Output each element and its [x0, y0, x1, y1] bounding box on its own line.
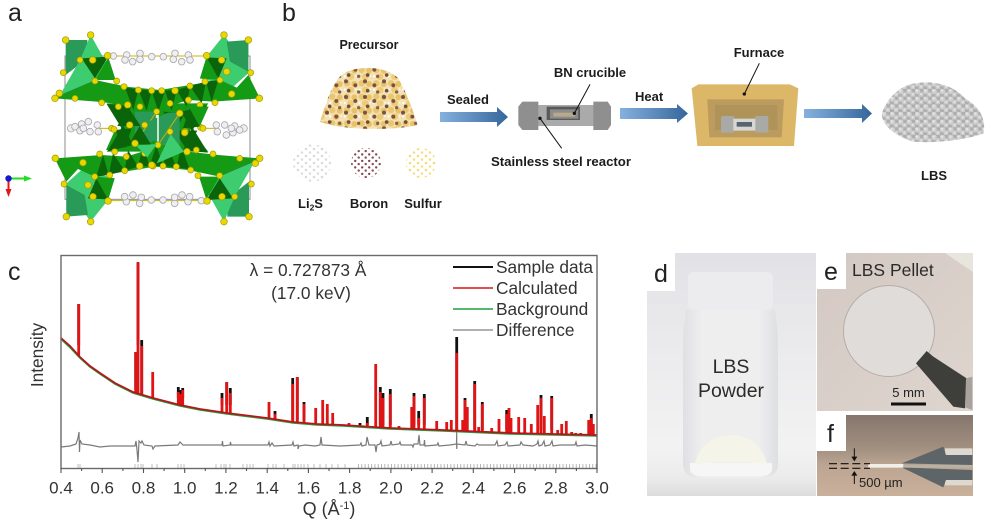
photo background: [647, 253, 816, 496]
thickness marker: [829, 448, 870, 484]
x axis labels: 2.0: [379, 478, 403, 498]
tweezers: [916, 351, 972, 410]
panel label e: e: [824, 258, 838, 286]
difference curve: [61, 432, 597, 462]
x axis labels: 1.8: [338, 478, 361, 498]
vial cap: [688, 272, 773, 310]
arrow: heat: [620, 104, 688, 123]
unit cell box: [65, 56, 250, 199]
panel e: pellet photo: [817, 253, 973, 411]
powder mound: [695, 435, 767, 464]
wavelength note: [250, 260, 367, 303]
x axis labels: 1.6: [297, 478, 320, 498]
lower half of crystal structure: [52, 107, 263, 225]
panel label f: f: [827, 420, 834, 448]
reactor: [518, 84, 611, 148]
scale bar 5 mm: 5 mm: [892, 385, 925, 400]
x axis labels: 0.6: [90, 478, 114, 498]
x axis labels: 0.4: [49, 478, 73, 498]
y axis title: Intensity: [27, 322, 47, 387]
label Furnace: Furnace: [734, 45, 784, 60]
corner highlight: [945, 253, 973, 272]
reflection tick marks: [78, 464, 597, 468]
furnace: [692, 63, 798, 146]
label LBS Pellet: LBS Pellet: [852, 260, 934, 280]
label LBS: LBS: [921, 168, 947, 183]
x axis labels: 1.2: [214, 478, 238, 498]
label Boron: Boron: [350, 196, 388, 211]
x axis labels: 0.8: [132, 478, 155, 498]
wavelength note: λ = 0.727873 Å: [250, 260, 367, 280]
panel label d: d: [654, 260, 668, 288]
arrow: to LBS: [804, 104, 872, 123]
x axis labels: 2.8: [544, 478, 568, 498]
LBS pile: [882, 82, 984, 142]
x axis labels: 2.4: [461, 478, 485, 498]
legend: [453, 257, 593, 340]
axis ticks: [61, 468, 597, 473]
photo background: [817, 253, 973, 411]
x axis title: Q (Å: [303, 499, 340, 519]
legend: Difference: [496, 320, 574, 340]
label BN crucible: BN crucible: [554, 65, 626, 80]
x axis labels: 1.0: [173, 478, 197, 498]
label Li2S: Li: [298, 196, 310, 211]
central light faces: [132, 129, 184, 168]
icon: sulfur dots: [406, 148, 436, 178]
precursor pile: [320, 68, 418, 129]
wavelength note: (17.0 keV): [271, 283, 351, 303]
x axis labels: 2.6: [503, 478, 526, 498]
x axis title: ): [349, 499, 355, 519]
icon: boron dots: [351, 148, 381, 178]
arrow: sealed: [440, 107, 508, 127]
plot frame: [61, 256, 597, 468]
photo background: [817, 415, 973, 496]
pellet disc: [844, 286, 934, 376]
half of crystal structure: [52, 32, 263, 150]
background line: [61, 339, 597, 436]
label stainless steel reactor: Stainless steel reactor: [491, 154, 631, 169]
panel a: crystal structure: [52, 32, 263, 225]
x axis labels: 3.0: [585, 478, 609, 498]
vial glass: [683, 310, 778, 478]
x axis title: -1: [340, 500, 349, 512]
label LBS Powder: Powder: [698, 380, 765, 402]
icon: Li2S dots: [293, 144, 331, 182]
vial bottom: [690, 463, 772, 476]
axes indicator: [5, 175, 32, 197]
panel label c: c: [8, 258, 20, 286]
calculated curve: [61, 338, 597, 435]
central framework backing: [107, 103, 208, 152]
legend: Calculated: [496, 278, 578, 298]
label Sealed: Sealed: [447, 92, 489, 107]
label Heat: Heat: [635, 89, 664, 104]
panel b: synthesis schematic: [293, 38, 984, 212]
scale bar 5 mm: [891, 385, 926, 406]
calculated peaks: [79, 262, 593, 440]
precursor heading: Precursor: [339, 38, 399, 52]
x axis labels: 1.4: [255, 478, 279, 498]
mask below background curve: [61, 339, 597, 442]
label Li2S: 2: [310, 202, 315, 212]
tweezers and pellet edge: [868, 447, 972, 487]
legend: Background: [496, 299, 588, 319]
panel c: diffraction chart: [27, 256, 609, 519]
x axis labels: 2.2: [420, 478, 444, 498]
panel d: vial photo: [647, 253, 816, 496]
label Li2S: S: [314, 196, 323, 211]
label 500 µm: 500 µm: [859, 475, 903, 490]
panel f: thickness photo: [817, 415, 973, 496]
x axis labels: [49, 478, 609, 498]
label LBS Powder: LBS: [713, 356, 749, 378]
label Sulfur: Sulfur: [404, 196, 442, 211]
label LBS Powder: [698, 356, 765, 402]
legend: Sample data: [496, 257, 593, 277]
